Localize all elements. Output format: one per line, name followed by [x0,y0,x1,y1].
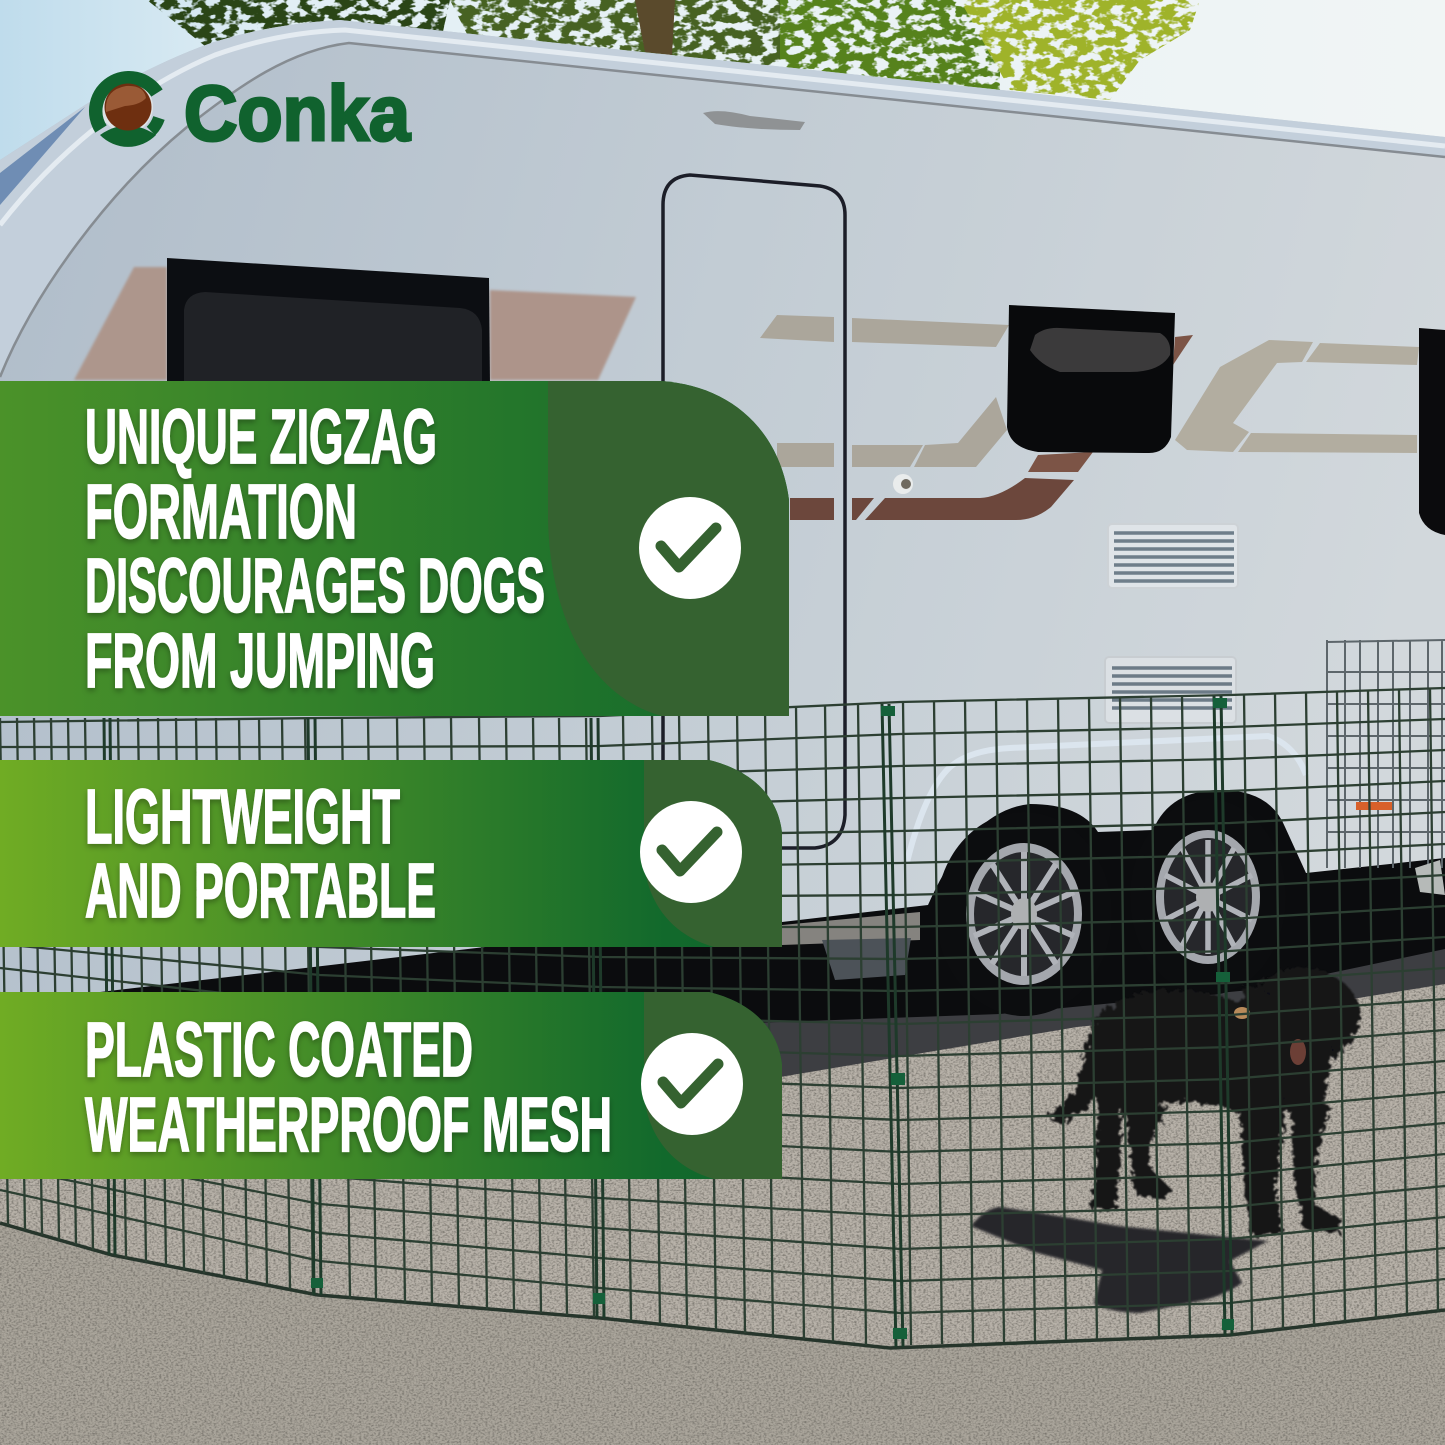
heading [85,394,545,704]
hitch light [1415,860,1445,895]
heading: DISCOURAGES DOGS [85,543,545,629]
trees [147,0,1200,100]
caravan light shadow on ground [0,850,1445,1095]
tree trunk [635,0,675,55]
dog muzzle [1290,1039,1306,1065]
orange reflector [1356,802,1392,810]
logo [96,69,411,157]
rear mesh panel [1327,640,1445,868]
dog shadow [971,1207,1268,1313]
dog chest [1230,985,1333,1112]
panel background [0,760,782,947]
ground outside the fence [0,1223,1445,1445]
fence mesh [0,688,1445,1348]
icon: check [641,1033,743,1135]
dog tail [1048,1019,1105,1125]
sky [0,0,1445,300]
brown stripes [790,478,1074,520]
heading: WEATHERPROOF MESH [85,1082,612,1168]
dog torso [1090,990,1285,1112]
vent lower [1105,657,1236,723]
rear fittings [782,912,920,945]
heading: FROM JUMPING [85,618,435,704]
left window [167,258,490,385]
caravan body [0,20,1445,1006]
caravan deep shadow [0,780,1445,1040]
wheel rear [1130,799,1286,995]
front edge [0,107,85,205]
heading: LIGHTWEIGHT [85,774,400,860]
skylight [703,111,805,130]
dog rear leg far [1125,1105,1172,1199]
fence posts [104,696,1232,1347]
heading: UNIQUE ZIGZAG [85,394,437,480]
panel background [0,381,789,716]
logo mark [96,78,159,147]
roof highlight [0,30,1445,225]
vent upper [1108,524,1238,588]
logo wordmark: Conka [184,69,411,157]
roof band [0,20,1445,377]
gravel texture [0,960,1445,1445]
ground gravel [0,900,1445,1445]
dog collar tag [1234,1007,1250,1019]
panel: zigzag formation [0,381,789,716]
dog [1048,968,1360,1236]
icon: check [639,497,741,599]
dog head [1244,968,1360,1064]
tan stripes left [74,267,167,380]
panel accent [548,381,789,716]
wheel front [936,812,1112,1016]
dog front leg far [1292,1105,1342,1233]
fence clips [311,698,1234,1339]
dog rear leg near [1090,1105,1122,1210]
side skirt highlight [907,736,1306,862]
panel accent [644,760,782,947]
heading [85,774,436,934]
panel accent [644,992,782,1179]
heading: PLASTIC COATED [85,1007,473,1093]
far-right window [1419,328,1445,535]
door lamp [893,474,913,494]
panel background [0,992,782,1179]
panel: lightweight [0,760,782,947]
heading: AND PORTABLE [85,848,436,934]
right window [1007,305,1175,453]
grey stripes [760,315,1009,467]
heading: FORMATION [85,469,357,555]
panel: weatherproof mesh [0,992,782,1179]
door outline [663,175,845,900]
dog front leg near [1240,1105,1286,1236]
heading [85,1007,612,1168]
roof trim line [0,43,1445,377]
icon: check [640,801,742,903]
right window glass reflection [1030,328,1170,372]
